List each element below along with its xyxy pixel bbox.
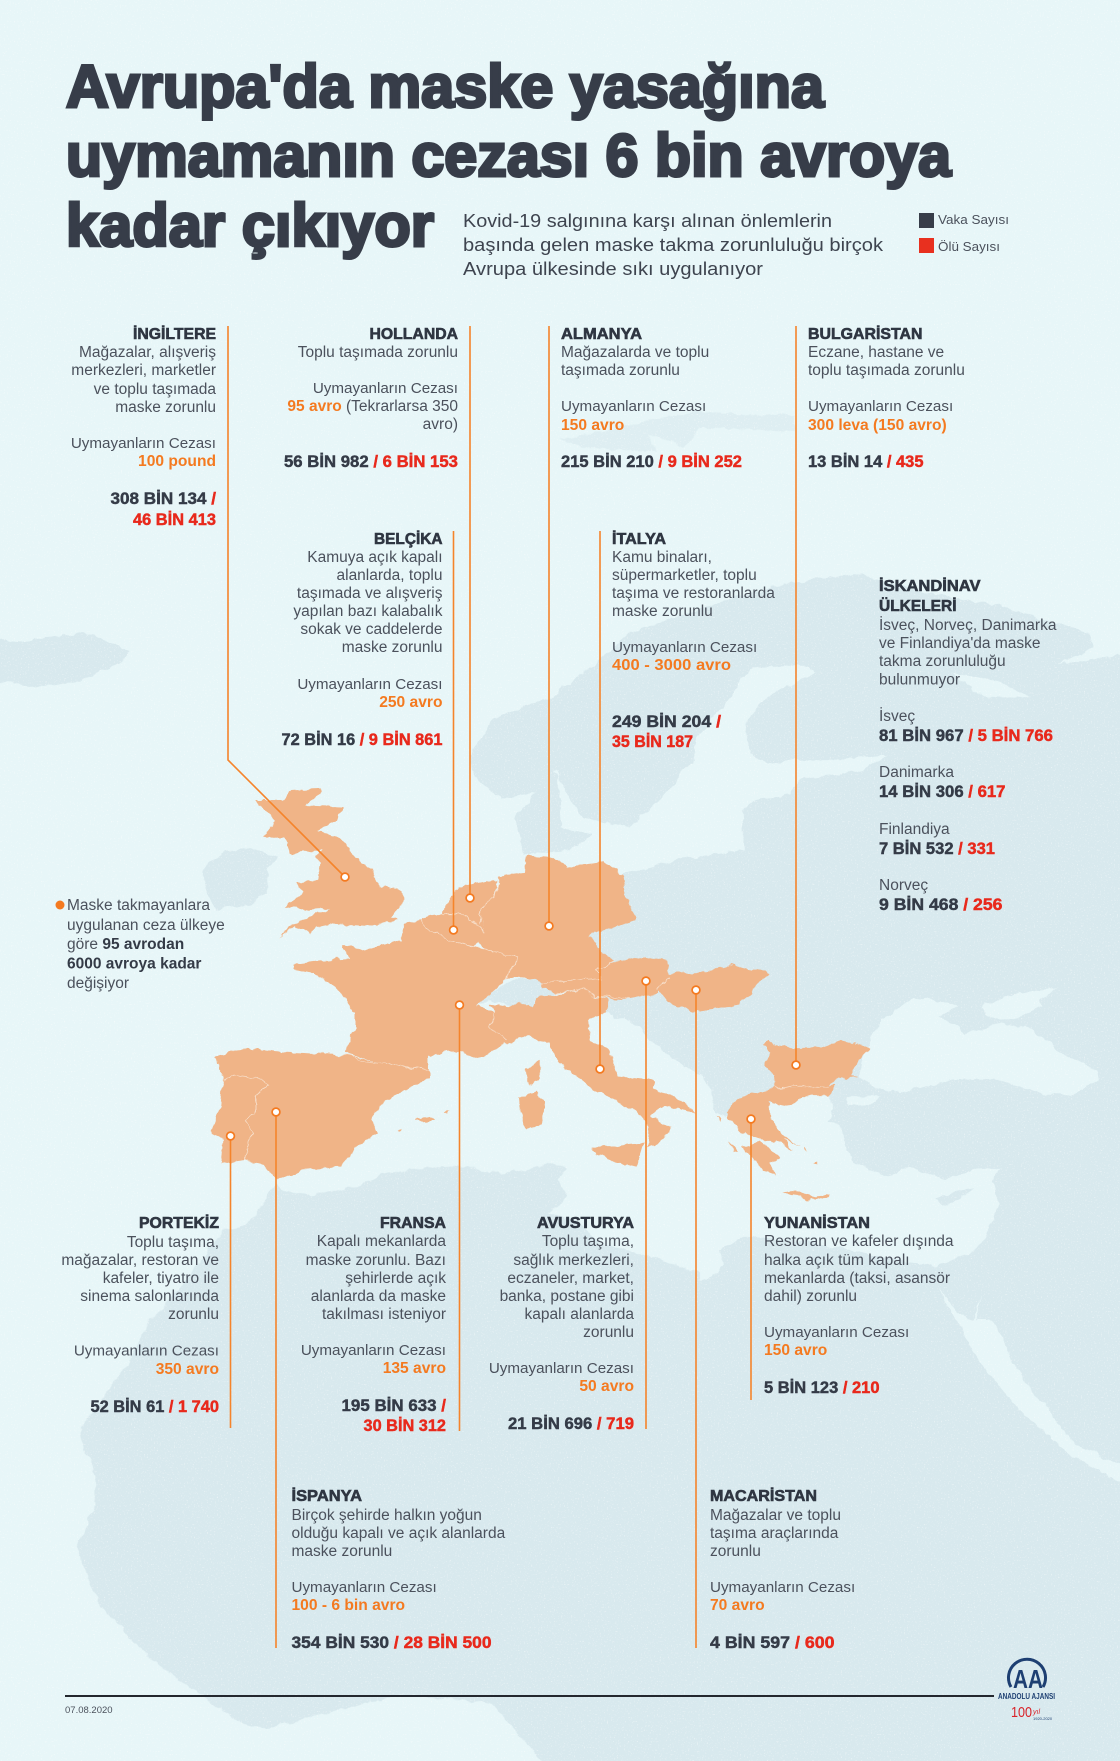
panel: Macaristan: 70 avro [710, 1597, 765, 1614]
panel: Fransa: takılması isteniyor [322, 1306, 446, 1323]
footer line [65, 1695, 994, 1697]
panel: Almanya: Uymayanların Cezası [561, 398, 706, 415]
Balkans and Ireland [202, 848, 820, 1117]
Crete [783, 1190, 830, 1199]
leader line: Avusturya [642, 977, 650, 1429]
Corsica [525, 1062, 539, 1087]
country borders [223, 882, 670, 1160]
panel: İtalya: süpermarketler, toplu [612, 567, 757, 584]
panel: Fransa: şehirlerde açık [345, 1270, 446, 1287]
panel: Bulgaristan: 13 BİN 14 / 435 [808, 453, 924, 471]
panel: Yunanistan: mekanlarda (taksi, asansör [764, 1270, 950, 1287]
panel: Almanya [561, 326, 742, 471]
panel: İngiltere: ve toplu taşımada [94, 381, 216, 398]
panel: İtalya: 249 BİN 204 / [612, 713, 721, 731]
panel: Macaristan: zorunlu [710, 1543, 761, 1560]
Austria [541, 957, 670, 1000]
note: fine range: göre 95 avrodan [67, 936, 184, 953]
logo: Anadolu Ajansı: AA [1013, 1664, 1043, 1694]
panel: Fransa: FRANSA [380, 1215, 446, 1232]
panel: Yunanistan [764, 1215, 954, 1397]
panel: Fransa: maske zorunlu. Bazı [306, 1252, 446, 1269]
panel: Belçika [282, 531, 443, 749]
panel: İspanya: Uymayanların Cezası [292, 1579, 437, 1596]
legend [919, 212, 1009, 254]
panel: Avusturya: 50 avro [579, 1378, 634, 1395]
Italy [490, 988, 694, 1147]
panel: İspanya [292, 1488, 506, 1652]
panel: Macaristan [710, 1488, 855, 1652]
panel: Yunanistan: halka açık tüm kapalı [764, 1252, 910, 1269]
panel: İskandinav Ülkeleri: bulunmuyor [879, 672, 960, 688]
intro text: Kovid-19 salgınına karşı alınan önlemlerin [463, 211, 832, 231]
panel: Portekiz [61, 1215, 220, 1416]
legend: cases: Vaka Sayısı [938, 212, 1009, 227]
title [66, 53, 952, 259]
panel: Bulgaristan: toplu taşımada zorunlu [808, 362, 965, 379]
panel: Yunanistan: dahil) zorunlu [764, 1288, 857, 1305]
Hungary [658, 965, 770, 1012]
United Kingdom [256, 788, 404, 937]
panel: Avusturya [489, 1215, 634, 1433]
panel: Yunanistan: 150 avro [764, 1342, 827, 1359]
Peloponnese [742, 1142, 780, 1177]
panel: İspanya: 100 - 6 bin avro [292, 1597, 405, 1614]
panel: Macaristan: 4 BİN 597 / 600 [710, 1634, 834, 1652]
Germany [474, 855, 635, 983]
note: fine range [56, 897, 225, 992]
panel: Almanya: ALMANYA [561, 326, 642, 343]
panel: Avusturya: banka, postane gibi [500, 1288, 634, 1305]
panel: İskandinav Ülkeleri: 9 BİN 468 / 256 [879, 896, 1002, 914]
intro text: Avrupa ülkesinde sıkı uygulanıyor [463, 259, 763, 279]
Switzerland [478, 978, 558, 1010]
intro text [463, 211, 884, 279]
panel: İskandinav Ülkeleri: İSKANDİNAV [879, 578, 981, 595]
logo: Anadolu Ajansı: yıl [1032, 1709, 1040, 1716]
panel: İspanya: 354 BİN 530 / 28 BİN 500 [292, 1634, 492, 1652]
panel: İtalya: 35 BİN 187 [612, 733, 693, 751]
panel: İskandinav Ülkeleri: 14 BİN 306 / 617 [879, 783, 1006, 801]
panel: Macaristan: Uymayanların Cezası [710, 1579, 855, 1596]
panel: Hollanda: avro) [423, 416, 458, 433]
panel: İngiltere: maske zorunlu [115, 399, 216, 416]
legend: deaths: Ölü Sayısı [938, 239, 1000, 254]
note: fine range: 6000 avroya kadar [67, 956, 201, 972]
date: 07.08.2020 [65, 1705, 113, 1716]
panel: Portekiz: kafeler, tiyatro ile [103, 1270, 219, 1287]
panel: İskandinav Ülkeleri: İsveç, Norveç, Danimarka [879, 616, 1057, 634]
panel: Belçika: Kamuya açık kapalı [307, 549, 442, 566]
Sicily [592, 1143, 644, 1167]
panel: Portekiz: zorunlu [168, 1306, 219, 1323]
panel: Belçika: maske zorunlu [342, 639, 442, 656]
panel: Fransa: 135 avro [383, 1360, 446, 1377]
panel: Yunanistan: YUNANİSTAN [764, 1215, 870, 1232]
panel: Fransa: Kapalı mekanlarda [317, 1233, 446, 1250]
panel: Yunanistan: Restoran ve kafeler dışında [764, 1233, 954, 1250]
Bulgaria, Greece and islands [717, 1040, 870, 1199]
panel: İtalya: İTALYA [612, 531, 666, 548]
panel: İngiltere: merkezleri, marketler [71, 362, 216, 379]
panel: Avusturya: sağlık merkezleri, [513, 1252, 634, 1269]
panel: Belçika: taşımada ve alışveriş [297, 585, 443, 602]
panel: İskandinav Ülkeleri: Danimarka [879, 764, 954, 781]
note: fine range: Maske takmayanlara [67, 897, 210, 914]
panel: Portekiz: mağazalar, restoran ve [61, 1252, 219, 1269]
logo: Anadolu Ajansı: 1920-2020 [1033, 1716, 1053, 1721]
panel: Hollanda: HOLLANDA [370, 326, 458, 343]
panel: Yunanistan: 5 BİN 123 / 210 [764, 1379, 880, 1397]
panel: Hollanda: 95 avro (Tekrarlarsa 350 [287, 398, 458, 415]
logo: Anadolu Ajansı: ANADOLU AJANSI [998, 1692, 1055, 1701]
title: uymamanın cezası 6 bin avroya [66, 122, 952, 189]
panel: İngiltere [71, 326, 216, 529]
panel: Portekiz: Toplu taşıma, [127, 1234, 219, 1251]
panel: İtalya: Kamu binaları, [612, 549, 712, 566]
panel: Fransa: 195 BİN 633 / [342, 1397, 446, 1415]
panel: Portekiz: PORTEKİZ [139, 1215, 220, 1232]
panel: Bulgaristan: 300 leva (150 avro) [808, 417, 947, 434]
title: Avrupa'da maske yasağına [66, 53, 825, 120]
panel: Almanya: 150 avro [561, 417, 624, 434]
panel: İtalya: maske zorunlu [612, 603, 713, 620]
panel: İngiltere: Uymayanların Cezası [71, 435, 216, 452]
panel: Avusturya: AVUSTURYA [537, 1215, 634, 1232]
panel: Belçika: yapılan bazı kalabalık [293, 603, 443, 620]
panel: İskandinav Ülkeleri: İsveç [879, 707, 915, 725]
Scandinavia and Russia [469, 412, 1120, 1013]
panel: Hollanda: Uymayanların Cezası [313, 380, 458, 397]
panel: Belçika: Uymayanların Cezası [297, 676, 442, 693]
panel: İspanya: Birçok şehirde halkın yoğun [292, 1507, 482, 1524]
leader line: İngiltere [228, 326, 349, 881]
panel: İspanya: olduğu kapalı ve açık alanlarda [292, 1525, 506, 1542]
panel: Bulgaristan: Uymayanların Cezası [808, 398, 953, 415]
panel: Portekiz: 350 avro [156, 1361, 219, 1378]
panel: Avusturya: 21 BİN 696 / 719 [508, 1415, 634, 1433]
leader line: İspanya [272, 1108, 280, 1648]
panel: İtalya: taşıma ve restoranlarda [612, 585, 775, 602]
leader line: Portekiz [227, 1132, 234, 1428]
panel: İtalya: Uymayanların Cezası [612, 639, 757, 656]
leader line: Yunanistan [747, 1115, 755, 1400]
panel: Almanya: taşımada zorunlu [561, 362, 680, 379]
leader line: Bulgaristan [792, 326, 800, 1069]
panel: Belçika: alanlarda, toplu [336, 567, 442, 584]
Red Sea [937, 1287, 1120, 1488]
panel: İngiltere: 46 BİN 413 [133, 511, 216, 529]
note: fine range: değişiyor [67, 975, 129, 992]
Benelux [421, 880, 498, 947]
panel: Belçika: 72 BİN 16 / 9 BİN 861 [282, 731, 443, 749]
panel: İskandinav Ülkeleri [879, 578, 1057, 914]
panel: Bulgaristan: BULGARİSTAN [808, 326, 922, 343]
panel: İskandinav Ülkeleri: ÜLKELERİ [879, 598, 956, 615]
intro text: başında gelen maske takma zorunluluğu birçok [463, 235, 884, 255]
logo: Anadolu Ajansı [998, 1659, 1055, 1721]
panel: İngiltere: 100 pound [138, 453, 216, 470]
panel: İskandinav Ülkeleri: takma zorunluluğu [879, 653, 1006, 670]
panel: İskandinav Ülkeleri: 7 BİN 532 / 331 [879, 840, 995, 858]
panel: Hollanda [284, 326, 458, 471]
panel: İskandinav Ülkeleri: ve Finlandiya'da maske [879, 635, 1040, 652]
panel: Avusturya: kapalı alanlarda [525, 1306, 634, 1323]
panel: İskandinav Ülkeleri: Finlandiya [879, 821, 950, 838]
leader line: Fransa [456, 1001, 463, 1431]
panel: İtalya [612, 531, 775, 751]
panel: İngiltere: 308 BİN 134 / [110, 490, 216, 508]
panel: Almanya: 215 BİN 210 / 9 BİN 252 [561, 453, 742, 471]
Turkey, Middle East and Black Sea [700, 950, 1120, 1370]
Greece [727, 1083, 837, 1150]
panel: Belçika: 250 avro [379, 694, 442, 711]
Bulgaria [763, 1040, 870, 1088]
Iceland [0, 632, 130, 687]
leader line: Hollanda [466, 326, 474, 902]
panel: Avusturya: eczaneler, market, [507, 1270, 634, 1287]
Sardinia [517, 1092, 545, 1130]
logo: Anadolu Ajansı: 100 [1011, 1704, 1032, 1721]
panel: İspanya: İSPANYA [292, 1488, 362, 1505]
panel: Avusturya: Toplu taşıma, [542, 1233, 634, 1250]
panel: İspanya: maske zorunlu [292, 1543, 392, 1560]
Balearic Islands [398, 1112, 449, 1132]
panel: Fransa: alanlarda da maske [311, 1288, 446, 1305]
leader line: İtalya [596, 531, 604, 1073]
panel: İskandinav Ülkeleri: 81 BİN 967 / 5 BİN 766 [879, 727, 1053, 745]
panel: İtalya: 400 - 3000 avro [612, 657, 731, 674]
Spain and Portugal [211, 1048, 429, 1180]
panel: Portekiz: sinema salonlarında [80, 1288, 219, 1305]
panel: Macaristan: MACARİSTAN [710, 1488, 817, 1505]
countries of western and central Europe [211, 788, 770, 1180]
panel: Avusturya: Uymayanların Cezası [489, 1360, 634, 1377]
background map: surrounding lands and seas [0, 412, 1120, 1761]
panel: Bulgaristan: Eczane, hastane ve [808, 344, 944, 361]
panel: Hollanda: Toplu taşımada zorunlu [298, 344, 458, 361]
panel: Fransa [301, 1215, 446, 1435]
map: highlighted countries [211, 788, 870, 1199]
panel: Belçika: BELÇİKA [374, 531, 442, 548]
panel: Fransa: Uymayanların Cezası [301, 1342, 446, 1359]
leader line: Macaristan [692, 986, 700, 1648]
panel: Avusturya: zorunlu [583, 1324, 634, 1341]
Greek islands [717, 1117, 818, 1165]
Africa [76, 1163, 700, 1761]
note: fine range: uygulanan ceza ülkeye [67, 917, 225, 934]
panel: İngiltere: İNGİLTERE [133, 326, 216, 343]
France [294, 920, 517, 1070]
panel: Fransa: 30 BİN 312 [364, 1417, 446, 1435]
panel: Bulgaristan [808, 326, 965, 471]
panel: Portekiz: Uymayanların Cezası [74, 1342, 219, 1360]
leader line: Almanya [545, 326, 553, 930]
panel: Belçika: sokak ve caddelerde [300, 621, 442, 638]
panel: Macaristan: taşıma araçlarında [710, 1525, 839, 1542]
panel: Almanya: Mağazalarda ve toplu [561, 344, 709, 361]
panel: İskandinav Ülkeleri: Norveç [879, 877, 928, 894]
panel: Hollanda: 56 BİN 982 / 6 BİN 153 [284, 453, 458, 471]
panel: İngiltere: Mağazalar, alışveriş [79, 344, 216, 361]
panel: Yunanistan: Uymayanların Cezası [764, 1324, 909, 1341]
leader line: Belçika [450, 531, 457, 934]
panel: Macaristan: Mağazalar ve toplu [710, 1507, 841, 1524]
title: kadar çıkıyor [66, 192, 434, 259]
panel: Portekiz: 52 BİN 61 / 1 740 [90, 1398, 219, 1416]
